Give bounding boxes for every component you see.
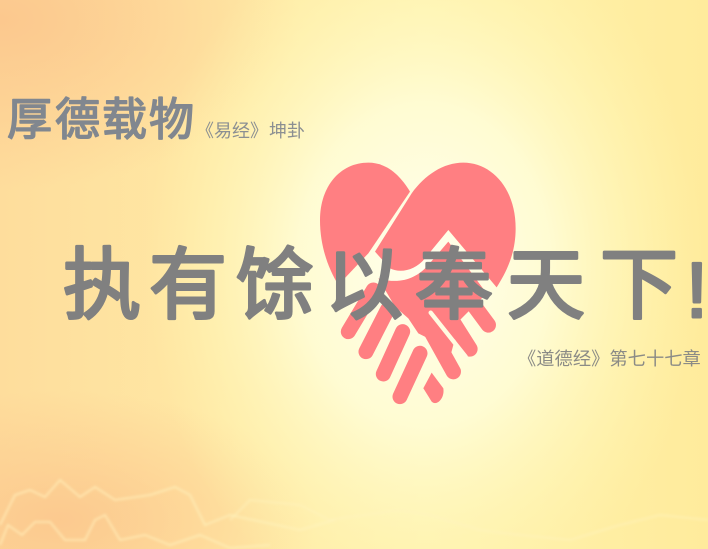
background: clouds along the bottom [0, 480, 708, 548]
right hand fingers [428, 287, 488, 372]
heart left half [320, 163, 410, 285]
right hand small finger [423, 373, 444, 403]
left hand fingers [348, 290, 420, 397]
source note: 《道德经》第七十七章: 《道德经》第七十七章 [518, 348, 701, 369]
icon: heart formed by two clasped hands [320, 163, 516, 403]
main slogan: 执有馀以奉天下!: 执有馀以奉天下 [63, 241, 678, 329]
right hand palm [378, 242, 487, 370]
source note: 《易经》坤卦: 《易经》 [196, 121, 268, 141]
main slogan: 执有馀以奉天下!: ! [686, 246, 708, 334]
gap between right hand fingers [431, 313, 466, 357]
heading: 厚德载物: 厚德载物 [7, 94, 194, 145]
heart right half [375, 163, 516, 287]
source note: 《易经》坤卦: 坤卦 [269, 121, 305, 141]
